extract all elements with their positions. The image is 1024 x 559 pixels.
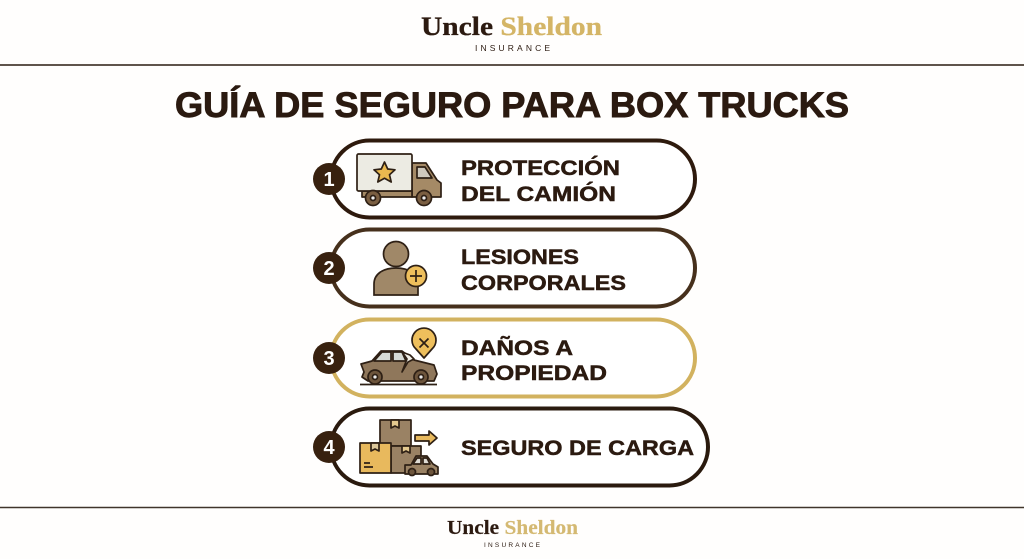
icon: box truck with star — [357, 154, 441, 206]
label — [461, 156, 620, 206]
badge 2 — [313, 252, 345, 284]
footer logo: Uncle Sheldon — [447, 517, 578, 539]
badge 1 — [313, 163, 345, 195]
label: DAÑOS A — [461, 337, 573, 360]
label: DEL CAMIÓN — [461, 182, 616, 206]
panel: protección del camión — [313, 140, 695, 218]
label: PROPIEDAD — [461, 362, 607, 385]
panel: lesiones corporales — [313, 230, 695, 306]
badge 4: 4 — [323, 437, 335, 459]
label: LESIONES — [461, 246, 579, 269]
badge 1: 1 — [323, 169, 335, 191]
header logo: INSURANCE — [475, 43, 550, 53]
badge 3: 3 — [323, 348, 335, 370]
icon: boxes, arrow and car — [360, 420, 438, 476]
header logo: Uncle Sheldon — [421, 12, 603, 41]
badge 4 — [313, 431, 345, 463]
label: PROTECCIÓN — [461, 156, 620, 180]
label: CORPORALES — [461, 272, 626, 295]
header logo — [421, 12, 603, 53]
icon: person with plus — [374, 242, 426, 295]
label — [461, 246, 626, 295]
badge 2: 2 — [323, 258, 335, 280]
title: GUÍA DE SEGURO PARA BOX TRUCKS — [175, 85, 849, 125]
icon: damaged car with warning marker — [360, 328, 437, 384]
footer logo: INSURANCE — [484, 542, 541, 549]
footer logo — [447, 517, 578, 549]
panel: daños a propiedad — [313, 320, 695, 396]
label: SEGURO DE CARGA — [461, 437, 694, 460]
panel: seguro de carga — [313, 408, 708, 486]
badge 3 — [313, 342, 345, 374]
label — [461, 337, 607, 385]
